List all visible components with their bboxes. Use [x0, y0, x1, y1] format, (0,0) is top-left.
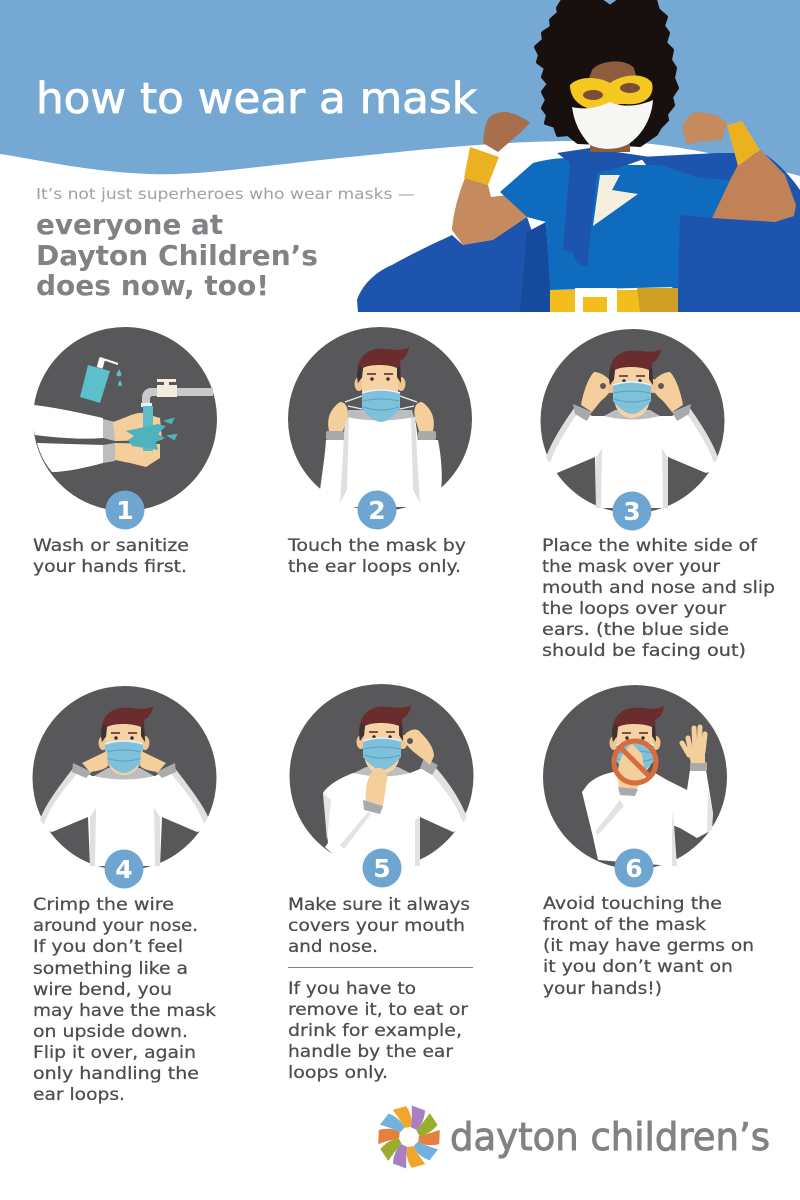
- number badge 1: [106, 490, 144, 530]
- step 5 text: loops only.: [288, 1063, 388, 1083]
- step 6 text: your hands!): [543, 979, 662, 999]
- right arm: [712, 150, 796, 222]
- blue shirt: [500, 158, 730, 290]
- step 3 text: the mask over your: [542, 557, 720, 577]
- person with torso: [320, 347, 442, 507]
- step 4 text: Flip it over, again: [33, 1043, 196, 1063]
- intro text: does now, too!: [36, 269, 269, 302]
- step 4 text: on upside down.: [33, 1022, 188, 1042]
- step 2 text: [287, 536, 466, 577]
- icon: sanitizer bottle: [80, 357, 122, 403]
- lightning emblem: [593, 175, 638, 226]
- number badge 4: 4: [115, 855, 133, 884]
- number badge 6: 6: [625, 854, 643, 883]
- number badge 2: [358, 490, 396, 530]
- step 1: [32, 327, 217, 530]
- step 4 circle: [32, 686, 216, 870]
- step 3 text: ears. (the blue side: [542, 620, 729, 640]
- tie ribbon: [557, 148, 650, 267]
- number badge 1: 1: [116, 496, 134, 525]
- number badge 5: [362, 848, 402, 888]
- intro text: It’s not just superheroes who wear masks —: [36, 185, 415, 203]
- step 4 text: something like a: [33, 959, 188, 979]
- left arm: [452, 178, 527, 245]
- icon: faucet: [141, 379, 213, 407]
- number badge 3: 3: [623, 497, 641, 526]
- step 4 text: If you don’t feel: [33, 937, 183, 957]
- number badge 6: [614, 848, 654, 888]
- step 3 text: the loops over your: [542, 599, 726, 619]
- step 3 text: Place the white side of: [542, 536, 758, 556]
- left fist and bracer: [464, 112, 530, 185]
- title: how to wear a mask: [36, 74, 477, 124]
- hands: [113, 413, 162, 467]
- forehead: [589, 61, 636, 83]
- number badge 2: 2: [368, 496, 386, 525]
- step 3: [540, 329, 724, 530]
- water stream: [143, 406, 153, 451]
- step 6: [543, 685, 727, 888]
- step 2: [288, 327, 472, 530]
- person with torso: [582, 706, 713, 866]
- step 6 text: [543, 894, 754, 999]
- right fist and bracer: [682, 112, 760, 166]
- step 4 text: around your nose.: [33, 916, 198, 936]
- step 3 text: should be facing out): [542, 641, 746, 661]
- step 4 text: only handling the: [33, 1064, 199, 1084]
- hero: child in superhero costume and mask: [357, 0, 800, 312]
- yellow eye mask: [570, 75, 653, 110]
- hair: [536, 0, 677, 145]
- step 6 text: front of the mask: [543, 915, 706, 935]
- step 3 circle: [540, 329, 724, 513]
- step 5 text: handle by the ear: [288, 1042, 453, 1062]
- icon: prohibited sign: [614, 741, 656, 783]
- intro text: everyone at: [36, 208, 223, 241]
- sleeves: [32, 405, 103, 472]
- step 5 circle: [290, 684, 474, 868]
- raised hand: [682, 727, 705, 763]
- step 1 circle: [33, 327, 217, 511]
- step 4: [32, 686, 216, 888]
- step 6 circle: [543, 685, 727, 869]
- step 5 text: [288, 895, 473, 1083]
- step 5 text: Make sure it always: [288, 895, 470, 915]
- step 5 text: and nose.: [288, 937, 378, 957]
- step 1 text: your hands first.: [33, 557, 187, 577]
- logo pinwheel: [378, 1105, 440, 1169]
- step 4 text: wire bend, you: [33, 980, 172, 1000]
- step 5: [290, 684, 474, 888]
- step 3 text: mouth and nose and slip: [542, 578, 775, 598]
- logo: dayton children's: [378, 1105, 770, 1169]
- step 1 text: Wash or sanitize: [33, 536, 189, 556]
- step 2 text: the ear loops only.: [288, 557, 461, 577]
- water splash: [126, 424, 166, 450]
- step 4 text: Crimp the wire: [33, 895, 174, 915]
- person with torso: [323, 705, 467, 866]
- number badge 3: [612, 492, 652, 530]
- step 4 text: ear loops.: [33, 1085, 125, 1105]
- intro text: Dayton Children’s: [36, 239, 318, 272]
- person with torso: [546, 349, 718, 508]
- cape: [357, 153, 800, 312]
- logo wordmark: dayton children’s: [450, 1115, 770, 1159]
- step 5 text: covers your mouth: [288, 916, 465, 936]
- intro text: [36, 185, 415, 302]
- person with torso: [40, 706, 208, 866]
- step 6 text: it you don’t want on: [543, 957, 733, 977]
- step 5 text: remove it, to eat or: [288, 1000, 468, 1020]
- cuffs: [103, 419, 115, 463]
- step 5 text: drink for example,: [288, 1021, 462, 1041]
- step 1 text: [33, 536, 189, 577]
- step 6 text: Avoid touching the: [543, 894, 722, 914]
- step 6 text: (it may have germs on: [543, 936, 754, 956]
- neck: [590, 143, 630, 152]
- step 4 text: may have the mask: [33, 1001, 216, 1021]
- white cloth mask: [572, 100, 653, 149]
- step 5 text: If you have to: [288, 979, 416, 999]
- belt: [550, 288, 678, 312]
- step 3 text: [542, 536, 775, 661]
- step 4 text: [33, 895, 216, 1105]
- step 2 text: Touch the mask by: [287, 536, 466, 556]
- number badge 5: 5: [373, 854, 391, 883]
- header banner with wave: [0, 0, 800, 176]
- step 2 circle: [288, 327, 472, 511]
- number badge 4: [104, 850, 144, 888]
